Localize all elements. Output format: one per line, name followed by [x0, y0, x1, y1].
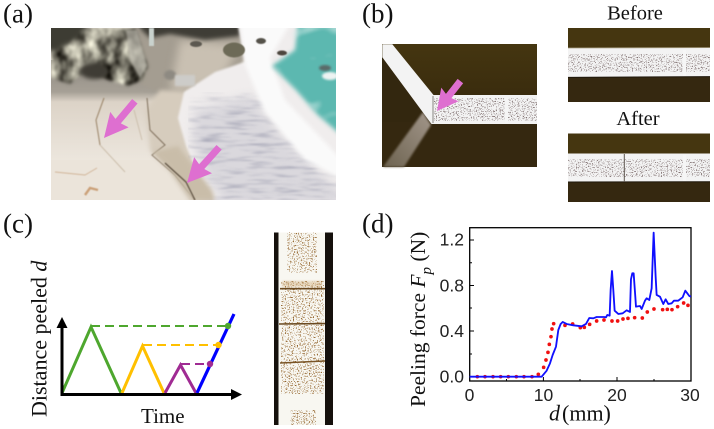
y-axis label: p — [419, 266, 435, 275]
rocks — [223, 42, 245, 58]
series: blue line — [470, 233, 691, 377]
series: blue line — [197, 314, 234, 393]
series: dashed guide lines — [91, 326, 226, 364]
x tick labels: 30 — [680, 385, 700, 405]
y-axis label: Peeling force F — [406, 274, 430, 407]
series: purple triangle — [165, 365, 196, 393]
waterfall — [149, 28, 154, 46]
heading: After: After — [616, 108, 660, 130]
x-axis label: d(mm) — [549, 400, 611, 426]
x tick labels — [465, 385, 700, 405]
cracks in the sand — [55, 98, 195, 200]
axis label: Time: Time — [141, 404, 185, 428]
teal water — [272, 24, 340, 134]
axes with arrows — [56, 317, 242, 400]
arrow: (b) crack marker — [428, 74, 469, 118]
axis label: Distance peeled d: Distance peeled d — [26, 260, 52, 417]
arrow: (a) crack marker 2 — [178, 139, 228, 191]
series: red dots — [475, 301, 690, 378]
back beach — [135, 28, 245, 94]
arrow: (a) crack marker 1 — [95, 94, 144, 146]
x tick labels: 20 — [607, 385, 627, 405]
plot frame and ticks — [470, 228, 691, 381]
panel: after photo — [568, 134, 710, 202]
panel: (a) beach photo — [51, 28, 336, 200]
y tick labels: 0.8 — [440, 276, 464, 296]
darker wet sand — [146, 90, 215, 204]
panel: (d) label: (d) — [362, 208, 393, 238]
y tick labels — [440, 230, 464, 386]
panel: (c) peeled strip photo — [274, 232, 333, 425]
heading: Before: Before — [607, 2, 663, 24]
y tick labels: 0.0 — [440, 366, 464, 386]
y-axis label: (N) — [406, 232, 430, 267]
panel: (b) peeling photo — [382, 44, 537, 167]
x tick labels: 10 — [534, 385, 553, 405]
markers — [207, 323, 231, 367]
chart: (d) peeling force plot — [406, 228, 700, 426]
series: yellow triangle — [122, 346, 164, 393]
series: green triangle — [62, 327, 121, 393]
y tick labels: 1.2 — [440, 230, 464, 250]
chart: (c) peeling schematic — [26, 260, 242, 428]
y tick labels: 0.4 — [440, 321, 464, 341]
foam — [178, 24, 340, 204]
x tick labels: 0 — [465, 385, 475, 405]
panel: before photo — [568, 28, 710, 102]
panel: (c) label: (c) — [3, 208, 33, 238]
cliff — [51, 28, 148, 86]
